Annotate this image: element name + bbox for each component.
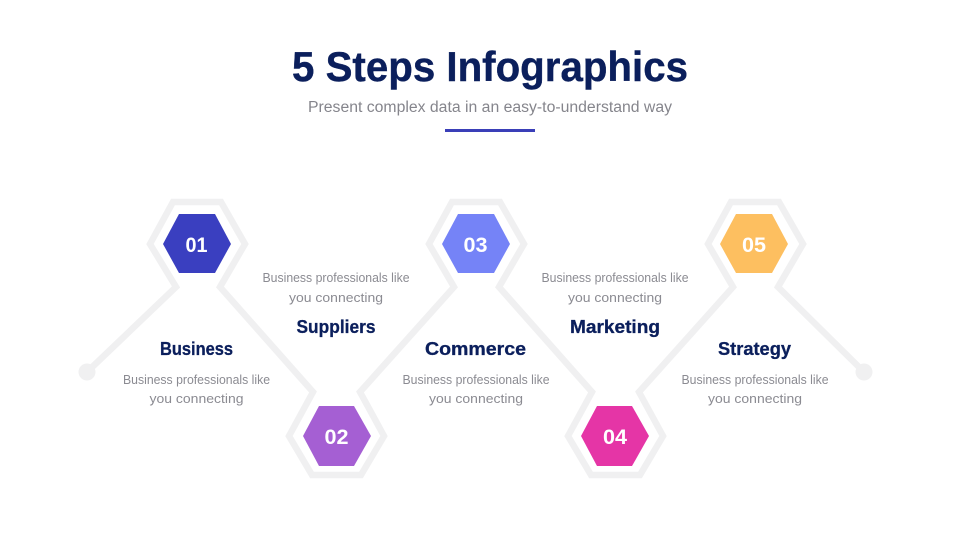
step 05 text: Strategy [682,338,828,406]
step 04 text: Marketing: you connecting [568,290,662,305]
step 03 text: Commerce [402,338,550,406]
step 01 text: Business [123,338,270,406]
step 03 text: Commerce: you connecting [429,391,523,406]
step 02 hexagon [303,406,371,466]
step 03 hexagon: 03 [464,234,488,257]
step 04 text: Marketing [542,270,688,337]
step 05 hexagon: 05 [742,234,766,257]
subtitle: Present complex data in an easy-to-understand way [308,99,672,116]
step 02 hexagon: 02 [324,426,348,449]
left end dot [78,364,96,380]
step 01 hexagon: 01 [186,234,208,257]
step 01 text: Business: Business professionals like [123,372,270,387]
step 01 text: Business: Business [160,338,233,359]
step 05 text: Strategy: you connecting [708,391,802,406]
step 05 text: Strategy: Strategy [718,338,792,359]
step 04 hexagon: 04 [603,426,627,449]
step 03 text: Commerce: Commerce [425,338,526,359]
step 04 text: Marketing: Business professionals like [542,270,688,285]
step 02 text: Suppliers: you connecting [289,290,383,305]
connector line with hexagon outlines [78,202,872,475]
step 04 hexagon [581,406,649,466]
step 05 text: Strategy: Business professionals like [682,372,828,387]
step 02 text: Suppliers [262,270,410,337]
step 03 hexagon [442,214,510,273]
step 04 text: Marketing: Marketing [570,316,660,337]
step 01 text: Business: you connecting [150,391,244,406]
title: 5 Steps Infographics [292,43,688,90]
step 05 hexagon [720,214,788,273]
step 02 text: Suppliers: Suppliers [296,316,376,337]
step 01 hexagon [163,214,231,273]
right end dot [856,364,872,380]
title underline [445,129,535,132]
step 03 text: Commerce: Business professionals like [402,372,550,387]
step 02 text: Suppliers: Business professionals like [262,270,410,285]
